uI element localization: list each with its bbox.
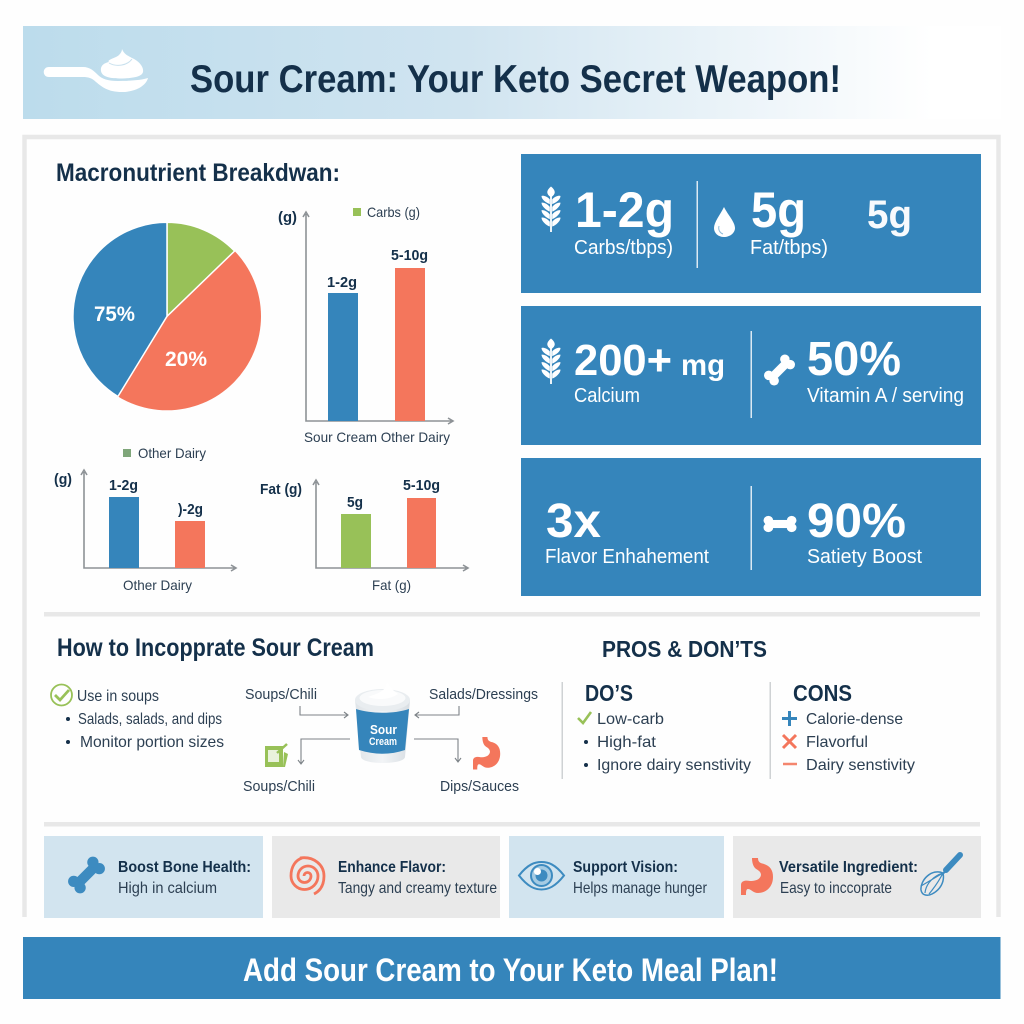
pie chart: [73, 222, 261, 410]
bar chart: other dairy: Other Dairy: [123, 577, 192, 593]
stat: flavor: Flavor Enhahement: [545, 546, 709, 568]
bar chart: other dairy: [54, 445, 236, 593]
stat: satiety: [807, 495, 922, 568]
icon: stomach: [473, 737, 500, 770]
card: boost bone health: Boost Bone Health:: [118, 859, 251, 876]
panel: how to incorporate: [51, 634, 538, 795]
card: boost bone health: High in calcium: [118, 880, 217, 897]
icon: eye: [519, 862, 564, 890]
list: do's: High-fat: [597, 734, 657, 751]
stat: flavor: 3x: [546, 495, 601, 548]
list: do's: [578, 680, 751, 774]
card: versatile ingredient: Easy to inccoprate: [780, 880, 892, 897]
heading: how to incorporate: How to Incopprate Sour Cream: [57, 634, 374, 662]
bar chart: sour cream vs other dairy: Sour Cream Other Dairy: [304, 429, 450, 445]
list: cons: CONS: [793, 680, 852, 706]
stat: fat: [750, 182, 828, 259]
card: versatile ingredient: Versatile Ingredient:: [779, 859, 918, 876]
icon: sour cream tub: Cream: [369, 736, 397, 748]
usage list: Use in soups: [77, 688, 159, 705]
icon: bone: [762, 353, 797, 387]
usage list: Monitor portion sizes: [80, 734, 224, 751]
stat: carbs: Carbs/tbps): [574, 237, 673, 259]
stat: satiety: Satiety Boost: [807, 546, 922, 568]
icon: fat drop: [714, 207, 735, 237]
stat: vitamin A: 50%: [807, 333, 901, 386]
stat: carbs: 1-2g: [575, 182, 674, 238]
labels: uses: Dips/Sauces: [440, 778, 519, 795]
bar chart: fat: [260, 477, 468, 593]
labels: uses: [243, 686, 538, 795]
bar chart: fat: Fat (g): [372, 577, 411, 593]
bar chart: sour cream vs other dairy: Carbs (g): [367, 204, 420, 220]
stat: fat: Fat/tbps): [750, 237, 828, 259]
pie chart: 20%: [165, 348, 207, 371]
list: cons: [782, 680, 915, 774]
heading: pros and don'ts: PROS & DON’TS: [602, 636, 767, 662]
stat panel: carbs and fat: [521, 154, 981, 293]
card: support vision: Helps manage hunger: [573, 880, 708, 897]
stat: extra fat value: 5g: [867, 193, 912, 237]
title banner: [23, 26, 1001, 119]
icon: whisk: [921, 855, 960, 895]
list: do's: Low-carb: [597, 711, 664, 728]
icon: sour cream tub: [355, 682, 410, 763]
card: enhance flavor: [272, 836, 500, 918]
bar chart: fat: 5g: [347, 494, 363, 511]
stat: flavor: [545, 495, 709, 568]
stat: calcium: Calcium: [574, 385, 640, 407]
card: support vision: Support Vision:: [573, 859, 678, 876]
stat: vitamin A: [807, 333, 964, 407]
pie chart: 75%: [94, 303, 135, 326]
stat panel: flavor and satiety: [521, 458, 981, 596]
card: versatile ingredient: [733, 836, 981, 918]
bar chart: fat: Fat (g): [260, 481, 302, 498]
list: do's: Ignore dairy senstivity: [597, 757, 751, 774]
stat: calcium: 200+: [574, 336, 672, 385]
usage list: [51, 684, 224, 751]
bar chart: sour cream vs other dairy: (g): [278, 209, 297, 226]
labels: uses: Salads/Dressings: [429, 686, 538, 703]
icon: spiral: [291, 858, 324, 894]
stat: vitamin A: Vitamin A / serving: [807, 385, 964, 407]
bar chart: other dairy: (g): [54, 471, 72, 488]
bar chart: sour cream vs other dairy: 5-10g: [391, 247, 428, 264]
arrows: [298, 706, 461, 764]
icon: wheat: [542, 338, 560, 384]
bar chart: sour cream vs other dairy: 1-2g: [327, 274, 357, 291]
main frame: [24, 137, 998, 917]
list: cons: Dairy senstivity: [806, 757, 915, 774]
icon: bone: [66, 854, 107, 896]
usage list: Salads, salads, and dips: [78, 711, 222, 728]
list: cons: Flavorful: [806, 734, 868, 751]
stat: calcium: [574, 336, 725, 407]
stat panel: calcium and vitamin A: [521, 306, 981, 445]
bar chart: other dairy: 1-2g: [109, 477, 138, 494]
title text: Sour Cream: Your Keto Secret Weapon!: [190, 58, 841, 101]
icon: spoon with cream: [44, 49, 148, 92]
labels: uses: Soups/Chili: [243, 778, 315, 795]
stat: fat: 5g: [751, 182, 806, 238]
bar chart: fat: 5-10g: [403, 477, 440, 494]
list: do's: DO’S: [585, 680, 633, 706]
footer banner: [23, 937, 1000, 999]
icon: wheat: [542, 186, 560, 232]
card: boost bone health: [44, 836, 263, 918]
bar chart: sour cream vs other dairy: [278, 204, 453, 445]
diagram: sour cream uses: [243, 682, 538, 795]
card: support vision: [509, 836, 724, 918]
card: enhance flavor: Enhance Flavor:: [338, 859, 446, 876]
list: cons: Calorie-dense: [806, 711, 903, 728]
icon: bone: [764, 516, 796, 532]
icon: sour cream tub: Sour: [370, 722, 397, 737]
icon: stomach: [741, 858, 773, 895]
panel: pros and don'ts: [562, 636, 915, 779]
labels: uses: Soups/Chili: [245, 686, 317, 703]
stat: satiety: 90%: [807, 495, 906, 548]
icon: green container: [265, 744, 288, 767]
heading: macronutrient breakdown: Macronutrient Breakdwan:: [56, 159, 340, 187]
bar chart: other dairy: Other Dairy: [138, 445, 206, 461]
stat: calcium: mg: [681, 349, 725, 382]
bar chart: other dairy: )-2g: [178, 501, 203, 518]
footer banner: Add Sour Cream to Your Keto Meal Plan!: [243, 952, 778, 988]
card: enhance flavor: Tangy and creamy texture: [338, 880, 497, 897]
panel: macronutrient breakdown: [54, 159, 468, 593]
